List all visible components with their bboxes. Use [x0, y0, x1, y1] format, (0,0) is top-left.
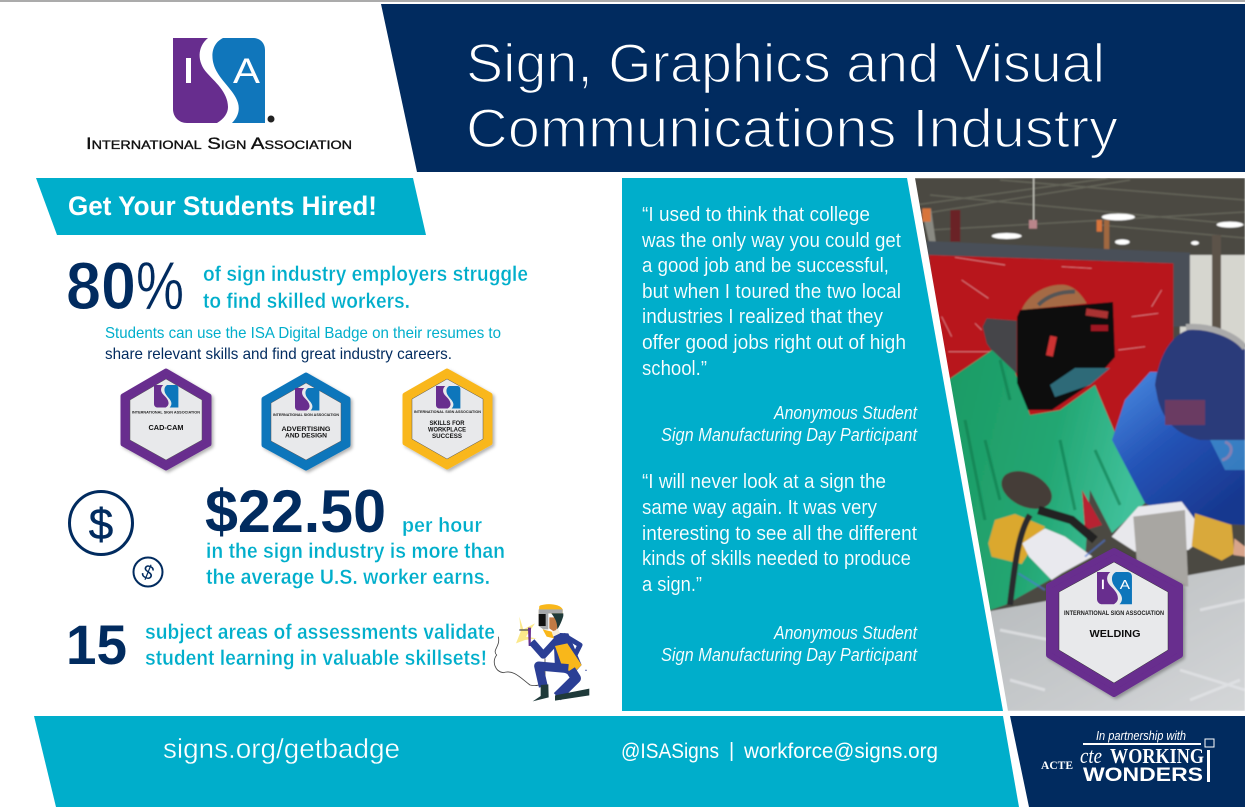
title — [466, 32, 1119, 159]
footer bar: workforce@signs.org — [743, 740, 938, 763]
quote one: but when I toured the two local — [642, 281, 901, 303]
badge: welding: WELDING — [1090, 629, 1141, 640]
stat: 80 percent: 80 — [66, 249, 136, 324]
attribution one: Sign Manufacturing Day Participant — [661, 425, 918, 445]
ISA logo: A — [233, 52, 261, 91]
footer bar: | — [729, 740, 734, 762]
stat: 15 subject areas: subject areas of assessments validate — [145, 621, 495, 644]
stat: 80 percent: to find skilled workers. — [203, 289, 410, 313]
title: Sign, Graphics and Visual — [466, 32, 1105, 94]
ISA logo — [86, 38, 352, 153]
icon: large dollar coin: $ — [89, 500, 113, 549]
quote one: a good job and be successful, — [642, 255, 889, 277]
quote one: school.” — [642, 358, 707, 380]
badge: welding — [1049, 551, 1180, 694]
digital badge text: Students can use the ISA Digital Badge on their resumes to — [105, 325, 501, 342]
stat: 80 percent: % — [136, 248, 184, 324]
photo: welding students — [900, 177, 1245, 711]
stat: 15 subject areas: student learning in valuable skillsets! — [145, 647, 487, 670]
badge: skills for workplace success: SUCCESS — [432, 433, 463, 440]
badge: skills for workplace success: INTERNATIONAL SIGN ASSOCIATION — [414, 409, 481, 414]
quote two: interesting to see all the different — [642, 523, 917, 545]
badge: advertising and design: AND DESIGN — [285, 432, 327, 440]
badge: advertising and design — [264, 375, 348, 468]
banner: get your students hired — [36, 178, 426, 235]
banner: get your students hired: Get Your Students Hired! — [68, 191, 377, 221]
quote two: “I will never look at a sign the — [642, 471, 886, 493]
attribution two: Sign Manufacturing Day Participant — [661, 645, 918, 665]
quote one: “I used to think that college — [642, 204, 870, 226]
stat: hourly wage — [205, 478, 505, 589]
partner logo panel: WORKING — [1110, 744, 1204, 768]
stat: hourly wage: $22.50 — [205, 478, 386, 545]
digital badge text — [105, 325, 501, 363]
footer bar: @ISASigns — [621, 740, 719, 763]
stat: 15 subject areas — [66, 613, 495, 676]
digital badge text: share relevant skills and find great industry careers. — [105, 346, 452, 363]
badge: skills for workplace success: WORKPLACE — [428, 426, 467, 434]
quote one — [641, 204, 906, 380]
badge: welding: INTERNATIONAL SIGN ASSOCIATION — [1064, 611, 1164, 617]
partner logo panel: cte — [1080, 743, 1102, 768]
quote one: was the only way you could get — [641, 230, 901, 252]
stat: hourly wage: in the sign industry is more than — [206, 540, 505, 563]
stat: 80 percent — [66, 248, 528, 324]
badge: CAD-CAM: INTERNATIONAL SIGN ASSOCIATION — [132, 410, 200, 414]
title: Communications Industry — [466, 97, 1119, 159]
attribution two — [661, 623, 918, 665]
ISA logo: International Sign Association — [86, 134, 352, 153]
partner logo panel: In partnership with — [1096, 728, 1186, 743]
badge: CAD-CAM: CAD-CAM — [148, 425, 184, 432]
badge: skills for workplace success: SKILLS FOR — [430, 420, 465, 427]
partner logo panel — [1010, 716, 1245, 807]
header banner — [381, 4, 1245, 172]
attribution one — [661, 403, 918, 445]
quote two: kinds of skills needed to produce — [642, 548, 911, 570]
quote two: same way again. It was very — [642, 497, 877, 519]
icon: small dollar coin: $ — [138, 561, 157, 585]
icon: small dollar coin — [134, 558, 162, 586]
partner logo panel: ACTE — [1041, 760, 1073, 772]
quote two: a sign.” — [642, 574, 702, 596]
footer bar — [34, 716, 1019, 807]
quote two — [642, 471, 917, 596]
badge: CAD-CAM — [123, 371, 209, 468]
icon: large dollar coin — [70, 492, 132, 554]
stat: hourly wage: per hour — [402, 515, 482, 537]
attribution two: Anonymous Student — [773, 623, 918, 643]
attribution one: Anonymous Student — [773, 403, 918, 423]
quote one: industries I realized that they — [642, 306, 883, 328]
stat: 15 subject areas: 15 — [66, 613, 127, 676]
badge: advertising and design: INTERNATIONAL SIGN ASSOCIATION — [273, 412, 339, 417]
panel: student quotes — [622, 178, 1003, 711]
badge: skills for workplace success — [405, 371, 490, 467]
badge: advertising and design: ADVERTISING — [282, 426, 330, 433]
icon: welder — [494, 604, 589, 701]
footer bar: signs.org/getbadge — [163, 733, 400, 764]
stat: 80 percent: of sign industry employers struggle — [203, 262, 528, 286]
badge: welding: A — [1120, 577, 1130, 592]
quote one: offer good jobs right out of high — [642, 332, 906, 354]
partner logo panel: WONDERS — [1083, 765, 1203, 786]
stat: hourly wage: the average U.S. worker earns. — [206, 566, 490, 589]
